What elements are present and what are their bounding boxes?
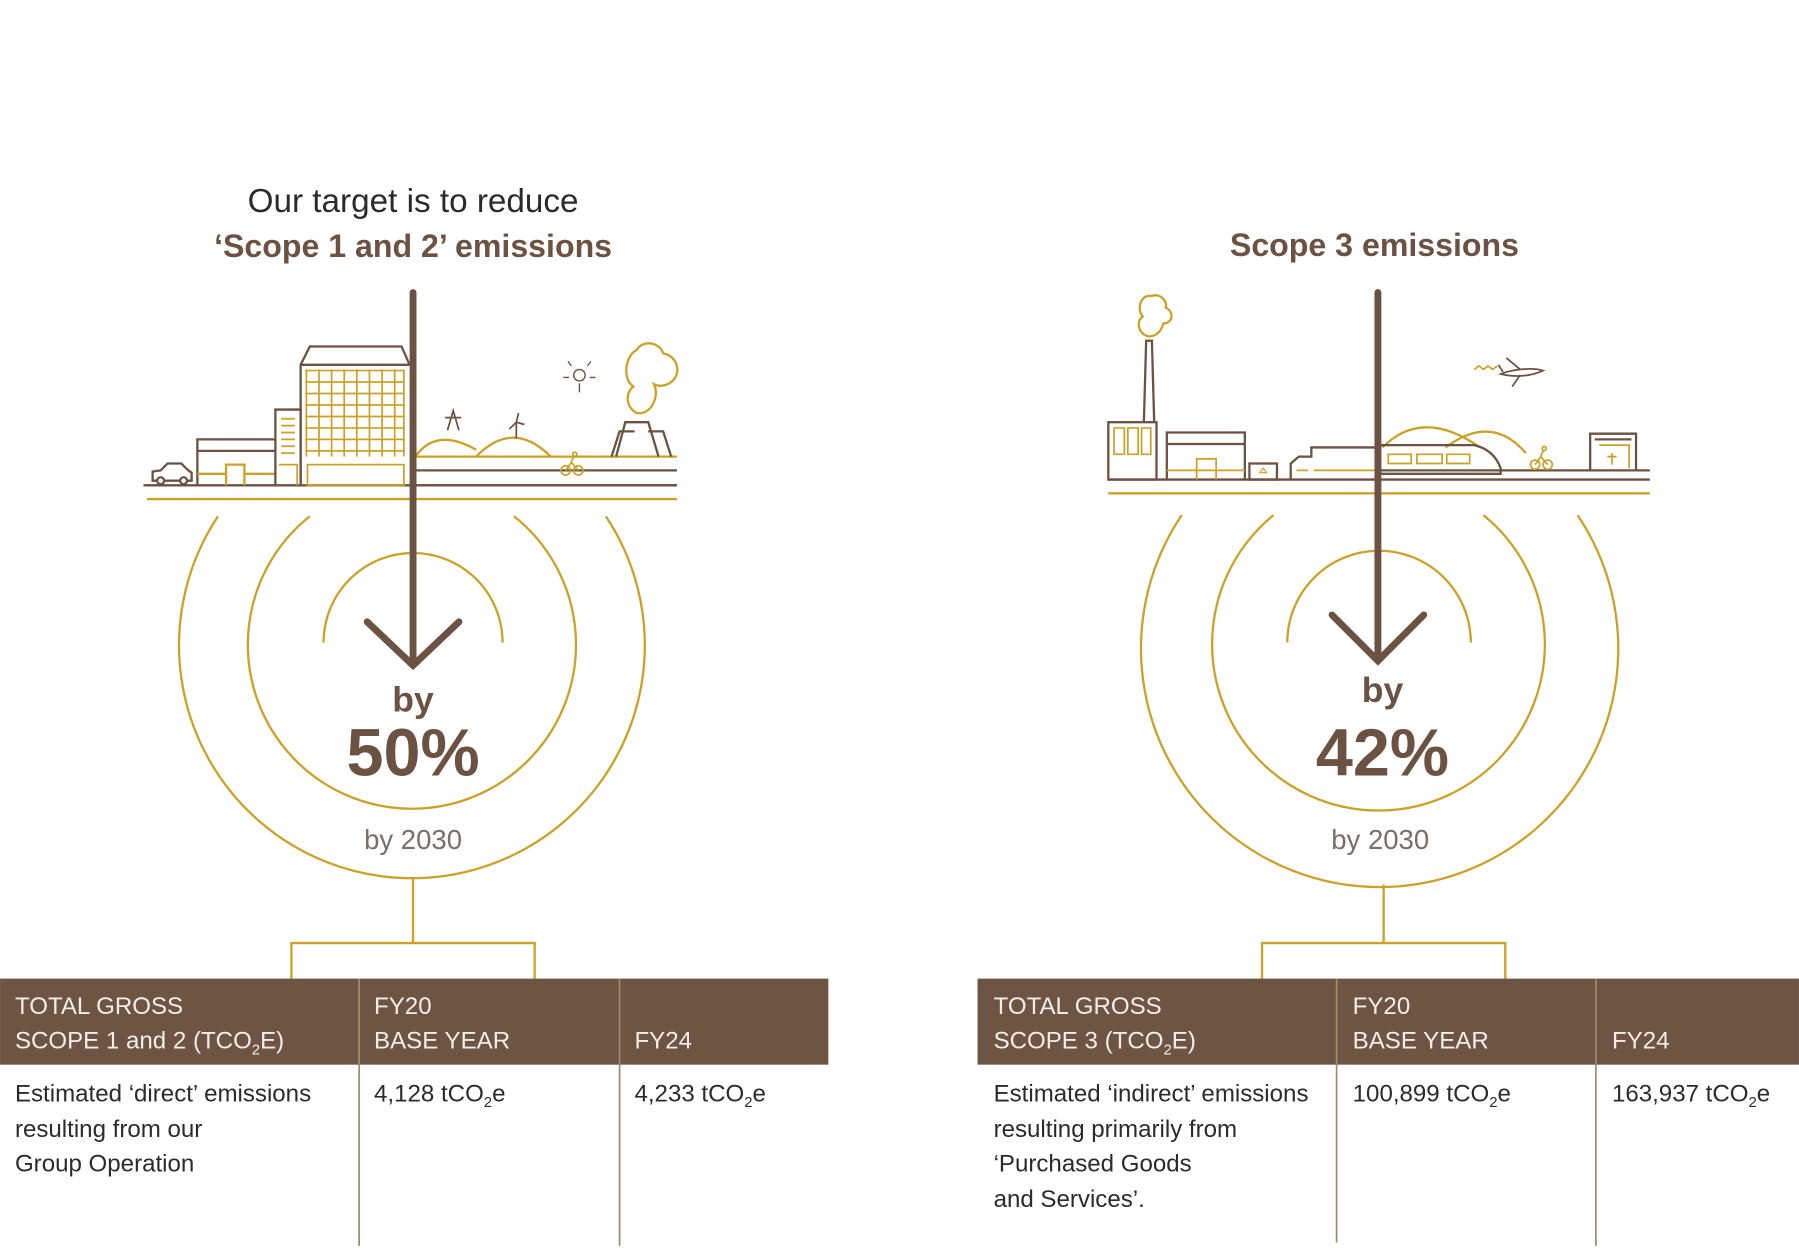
right 42% label	[1316, 670, 1449, 855]
left 50% label: by 2030	[364, 824, 462, 855]
left table: e	[753, 1080, 766, 1107]
left table: E)	[260, 1028, 284, 1055]
left cityscape illustration	[143, 343, 677, 499]
left table: 4,233 tCO	[634, 1080, 744, 1107]
right table: e	[1498, 1080, 1511, 1107]
right table: resulting primarily from	[994, 1116, 1237, 1143]
right cityscape illustration	[1108, 295, 1650, 493]
right 42% label: by	[1362, 670, 1403, 710]
left title: Our target is to reduce	[248, 183, 579, 220]
left 50% label: by	[392, 679, 434, 719]
right table: SCOPE 3 (TCO	[994, 1028, 1163, 1055]
right table	[978, 979, 1799, 1246]
right 42% label: 42%	[1316, 717, 1449, 791]
left table: FY24	[634, 1028, 692, 1055]
left table: 2	[252, 1042, 260, 1058]
left table: 2	[744, 1095, 753, 1111]
left 50% label	[346, 679, 480, 855]
right table: 2	[1749, 1095, 1757, 1111]
left 50% label: 50%	[346, 717, 480, 791]
left title: ‘Scope 1 and 2’ emissions	[214, 228, 612, 264]
right connector bracket	[1262, 885, 1505, 979]
left title	[214, 183, 612, 264]
right table: FY24	[1612, 1028, 1670, 1055]
right table: TOTAL GROSS	[994, 993, 1162, 1020]
right table: 2	[1489, 1095, 1498, 1111]
left table: SCOPE 1 and 2 (TCO	[15, 1028, 252, 1055]
left target circles	[179, 516, 645, 878]
car	[153, 463, 192, 484]
left table: e	[492, 1080, 506, 1107]
right table: Estimated ‘indirect’ emissions	[994, 1080, 1308, 1107]
right arrow	[1332, 293, 1424, 661]
left table	[0, 979, 828, 1246]
left table: 2	[484, 1095, 492, 1111]
right table: FY20	[1353, 993, 1410, 1020]
right target circles	[1141, 515, 1618, 887]
right table: 2	[1163, 1042, 1172, 1058]
left table: TOTAL GROSS	[15, 993, 183, 1020]
left table: BASE YEAR	[374, 1028, 510, 1055]
right table: ‘Purchased Goods	[994, 1150, 1192, 1177]
left connector bracket	[291, 878, 535, 979]
right table: BASE YEAR	[1353, 1028, 1489, 1055]
right 42% label: by 2030	[1331, 824, 1429, 855]
right table: and Services’.	[994, 1186, 1145, 1213]
left table: Estimated ‘direct’ emissions	[15, 1080, 311, 1107]
right title: Scope 3 emissions	[1230, 227, 1519, 263]
left table: FY20	[374, 993, 432, 1020]
right table: E)	[1172, 1028, 1196, 1055]
right table: 100,899 tCO	[1353, 1080, 1489, 1107]
left arrow	[367, 293, 459, 665]
right table: e	[1757, 1080, 1770, 1107]
left table: 4,128 tCO	[374, 1080, 484, 1107]
right table: 163,937 tCO	[1612, 1080, 1749, 1107]
left table: Group Operation	[15, 1150, 194, 1177]
left table: resulting from our	[15, 1116, 202, 1143]
